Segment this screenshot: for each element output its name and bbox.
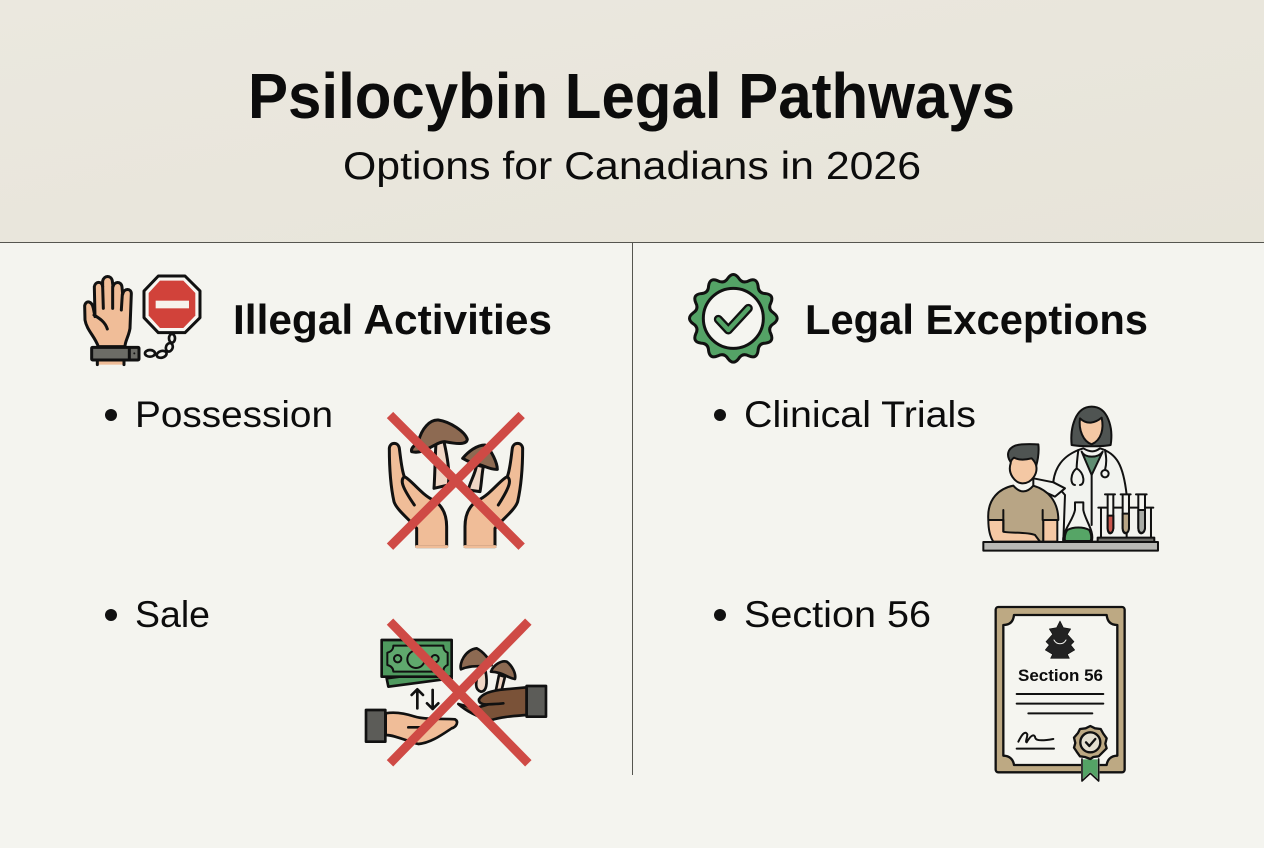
title: Psilocybin Legal Pathways bbox=[248, 60, 1015, 132]
bullet: possession: Possession bbox=[135, 394, 333, 435]
icon: green seal with checkmark bbox=[689, 274, 777, 362]
icon: raised hand in handcuff with stop sign bbox=[85, 276, 200, 365]
icon: section 56 certificate bbox=[996, 607, 1125, 781]
panel: illegal activities bbox=[85, 276, 552, 763]
icon: hands holding mushrooms crossed out bbox=[389, 415, 523, 547]
panel: legal exceptions bbox=[689, 274, 1158, 781]
bullet: clinical trials: Clinical Trials bbox=[744, 394, 976, 435]
certificate frame bbox=[996, 607, 1125, 781]
heading: legal exceptions: Legal Exceptions bbox=[805, 296, 1148, 343]
bullet: sale: Sale bbox=[135, 594, 210, 635]
subtitle: Options for Canadians in 2026 bbox=[343, 145, 921, 188]
icon: doctor with patient and test tubes bbox=[983, 407, 1158, 551]
certificate label: Section 56 bbox=[1018, 667, 1103, 685]
icon: cash exchanged for mushrooms crossed out bbox=[366, 622, 546, 763]
header band bbox=[0, 0, 1264, 242]
bullet: section 56: Section 56 bbox=[744, 594, 931, 635]
heading: illegal activities: Illegal Activities bbox=[233, 296, 552, 343]
